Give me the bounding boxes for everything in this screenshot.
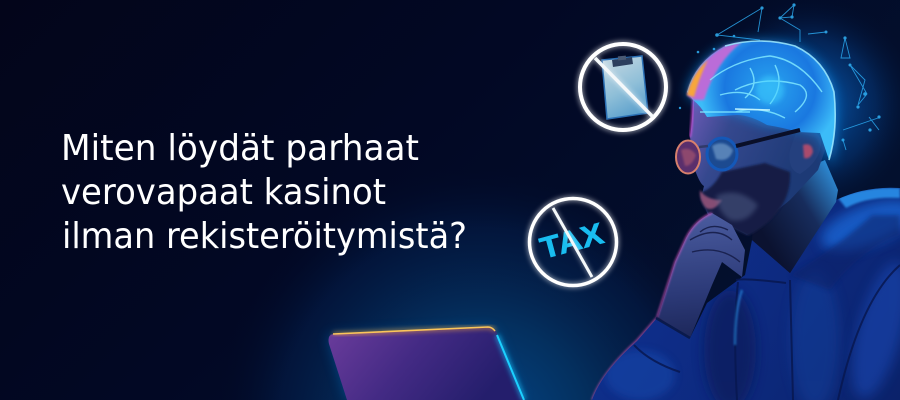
neck [752,160,838,273]
ear [789,130,821,174]
icon: crossed-out tax: TAX [537,217,607,266]
laptop [328,327,524,400]
hand on chin [656,213,745,338]
face and head [690,85,834,236]
icon: crossed-out tax [530,198,616,286]
network constellation [679,3,881,150]
brain glow [687,41,836,165]
beard [700,163,790,236]
glasses [676,130,800,174]
icon: crossed-out clipboard [580,44,666,130]
title: Miten löydät parhaat [61,128,419,169]
hoodie [590,180,900,400]
title: verovapaat kasinot [61,172,386,213]
title [61,128,467,257]
title: ilman rekisteröitymistä? [62,216,467,257]
